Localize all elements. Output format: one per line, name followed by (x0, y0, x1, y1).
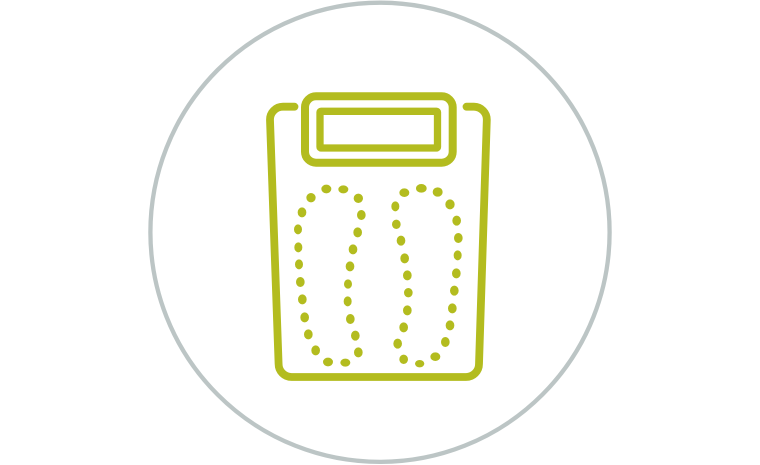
scale body outline (270, 107, 487, 377)
left footprint dotted outline (295, 185, 365, 366)
outer circle (150, 3, 610, 462)
icon: scale (270, 96, 487, 377)
display screen (320, 111, 438, 148)
right footprint dotted outline (392, 185, 462, 367)
display frame (305, 96, 453, 163)
